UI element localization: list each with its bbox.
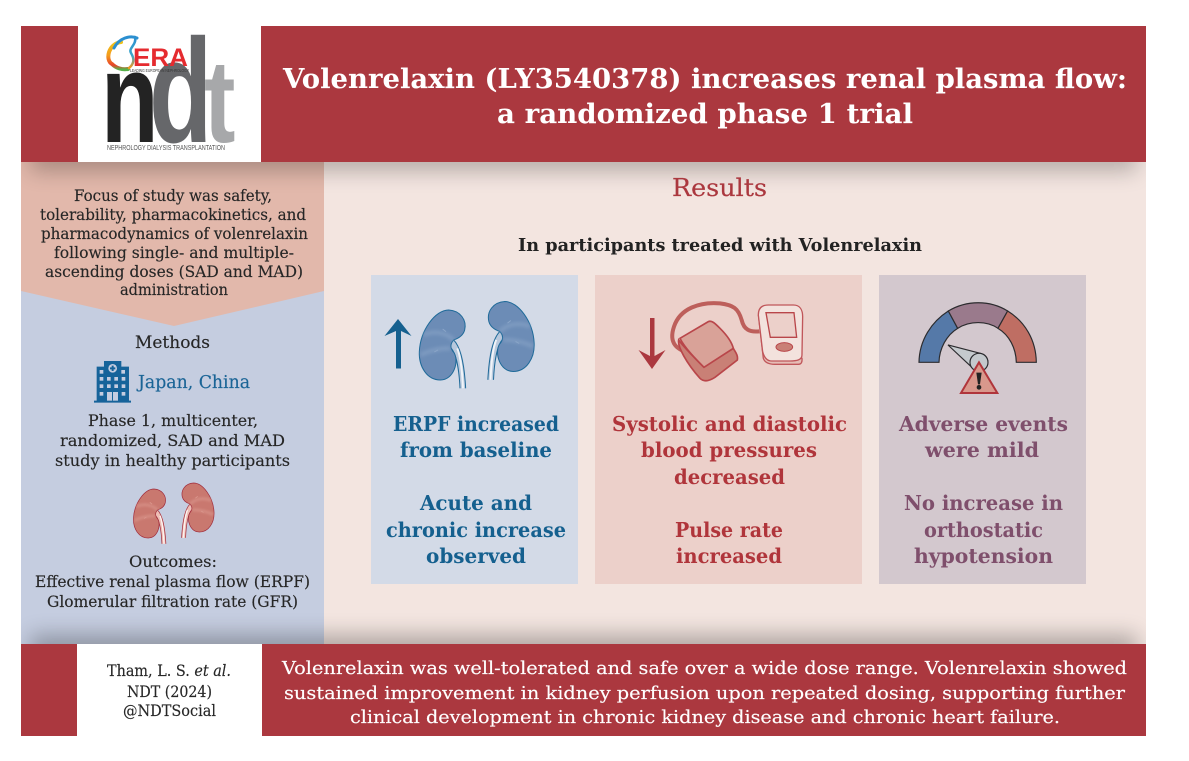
text: adverse events results [898,412,1068,568]
text: study focus: following single- and multiple- [54,244,294,262]
text: blood pressure results: Pulse rate [675,518,783,542]
icon: down arrow [638,318,666,369]
subheading: participants: In participants treated with Volenrelaxin [518,235,922,256]
text: adverse events results: Adverse events [898,412,1068,436]
text: adverse events results: hypotension [914,544,1053,568]
icon: red kidneys [133,483,214,544]
text: location: Japan, China [136,373,250,393]
logo: ndt wordmark [101,9,235,174]
heading: methods: Methods [135,333,210,352]
conclusion text: Volenrelaxin was well-tolerated and safe over a wide dose range. Volenrelaxin showed [281,658,1127,679]
text: study design: study in healthy participants [55,452,290,470]
text: outcomes: Effective renal plasma flow (ERPF) [35,573,310,591]
text: outcomes [35,553,310,611]
logo: ndt wordmark: n [101,25,159,169]
citation block: @NDTSocial [123,702,216,720]
panel: ERPF [371,275,578,584]
text: outcomes: Outcomes: [129,553,217,571]
citation block [77,644,262,736]
footer banner [21,644,1146,736]
panel: study focus [21,162,324,326]
heading: results: Results [672,174,767,202]
logo: ERA tagline: LEADING EUROPEAN NEPHROLOGY [130,68,189,73]
text: study design [55,412,290,470]
logo: ndt wordmark: d [149,9,212,174]
icon: hospital [94,361,131,403]
text: study focus: pharmacodynamics of volenrelaxin [41,225,308,243]
text: ERPF results: Acute and [419,491,532,515]
icon: blue kidneys [419,301,534,388]
text: ERPF results: from baseline [400,438,552,462]
text: study focus [40,187,308,299]
panel: methods [21,162,324,644]
conclusion text: clinical development in chronic kidney disease and chronic heart failure. [350,707,1060,728]
text: study focus: tolerability, pharmacokinetics, and [40,206,306,224]
shadows under header and above footer [30,140,1137,666]
icon: gauge with warning [919,303,1036,393]
icon: blood pressure monitor [672,303,803,381]
panel: blood pressure [595,275,862,584]
text: adverse events results: were mild [924,438,1039,462]
header banner [21,9,1146,174]
background panel: results [324,162,1146,644]
text: adverse events results: No increase in [904,491,1063,515]
text: ERPF results: observed [426,544,526,568]
logo: ERA swirl [108,37,137,69]
logo: ndt wordmark: t [204,35,235,167]
text: ERPF results: chronic increase [386,518,566,542]
text: study design: Phase 1, multicenter, [88,412,258,430]
logo: journal name: NEPHROLOGY DIALYSIS TRANSPLANTATION [107,143,225,152]
conclusion text: sustained improvement in kidney perfusion upon repeated dosing, supporting further [284,683,1125,704]
text: outcomes: Glomerular filtration rate (GFR) [47,593,298,611]
text: blood pressure results [612,412,847,568]
text: ERPF results [386,412,566,568]
text: blood pressure results: blood pressures [641,438,817,462]
panel: adverse events [879,275,1086,584]
text: study focus: Focus of study was safety, [74,187,272,205]
text: study focus: administration [120,281,228,299]
logo [78,9,261,174]
logo: ERA wordmark: ERA [133,44,188,72]
citation block: NDT (2024) [127,683,212,701]
title [282,63,1127,130]
text: blood pressure results: decreased [674,465,785,489]
conclusion text [281,658,1127,728]
text: study focus: ascending doses (SAD and MAD) [45,263,303,281]
icon: up arrow [384,319,412,368]
title: a randomized phase 1 trial [497,98,913,130]
text: blood pressure results: increased [676,544,782,568]
text: blood pressure results: Systolic and diastolic [612,412,847,436]
title: Volenrelaxin (LY3540378) increases renal plasma flow: [282,63,1127,95]
text: adverse events results: orthostatic [924,518,1043,542]
citation block: Tham, L. S. et al. [107,662,231,680]
text: study design: randomized, SAD and MAD [60,432,285,450]
text: ERPF results: ERPF increased [393,412,559,436]
